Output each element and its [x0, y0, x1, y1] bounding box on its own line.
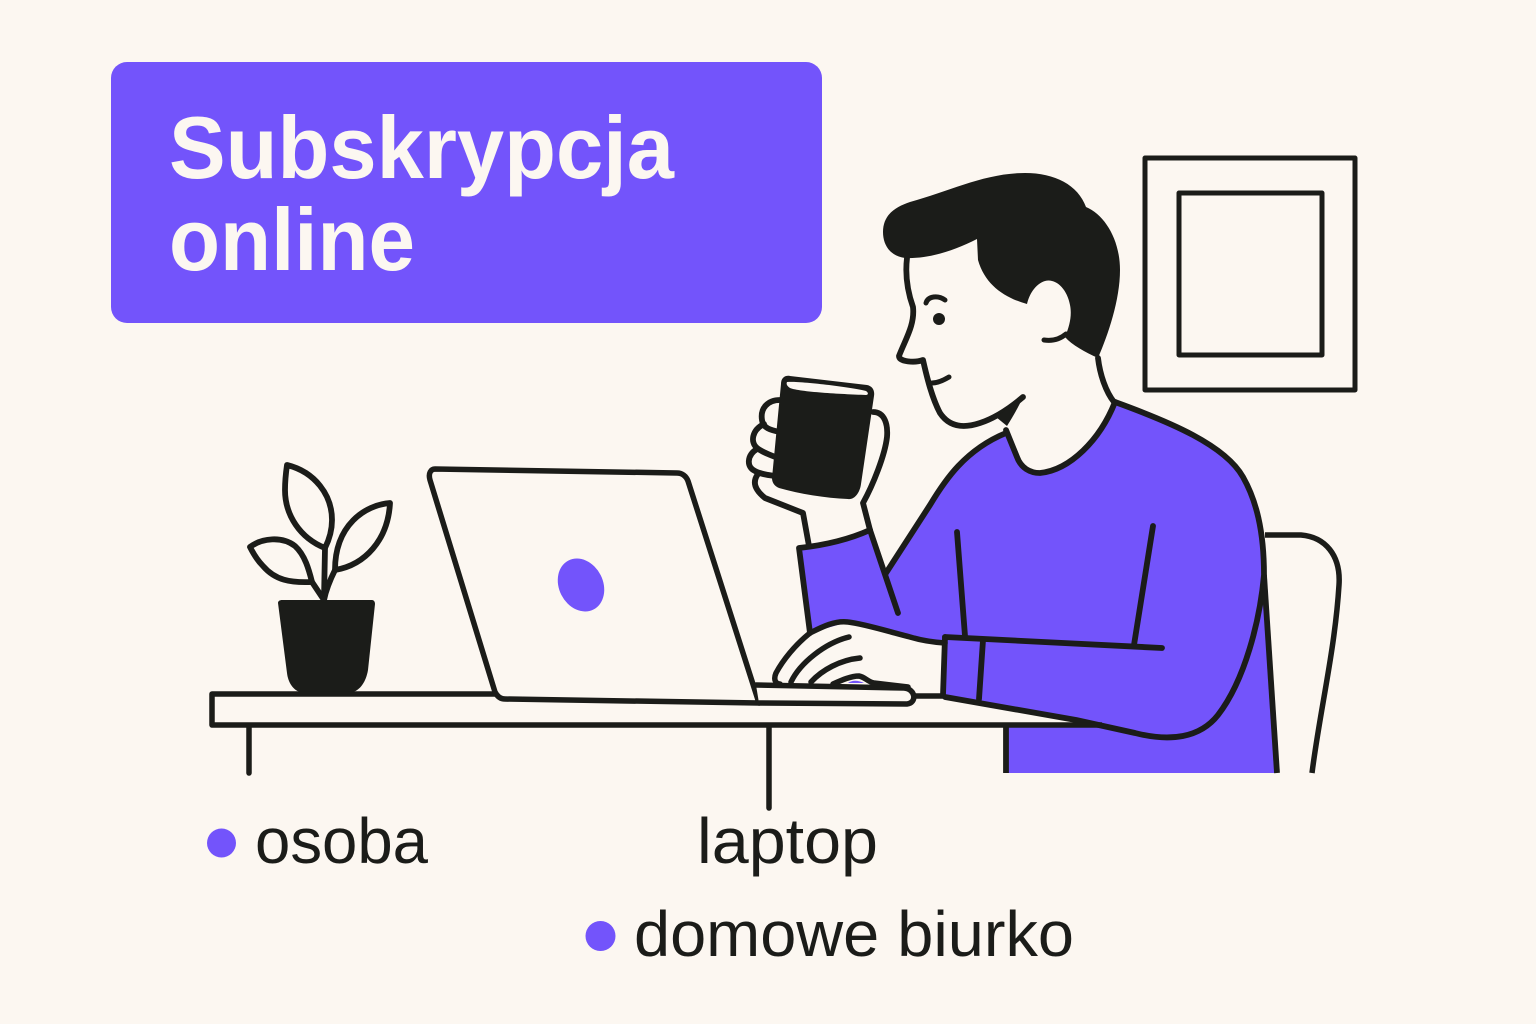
desk	[212, 694, 1102, 808]
laptop logo	[549, 551, 613, 619]
sweater outline	[799, 402, 1277, 773]
hair	[883, 173, 1120, 358]
legend: domowe biurko: domowe biurko	[634, 898, 1074, 970]
face	[899, 258, 1114, 426]
mug rim	[787, 382, 868, 395]
laptop	[429, 469, 914, 704]
title banner	[111, 62, 822, 323]
thumb gap	[848, 681, 864, 683]
person	[799, 173, 1277, 773]
sweater	[799, 402, 1277, 773]
jaw shadow	[996, 397, 1023, 426]
laptop base	[756, 685, 914, 704]
mug body	[772, 376, 874, 499]
coffee mug and hand	[749, 376, 887, 546]
typing hand	[775, 622, 945, 687]
title banner: online	[169, 190, 415, 289]
leaves	[285, 465, 332, 548]
legend: laptop: laptop	[697, 805, 878, 877]
eye	[933, 313, 945, 325]
picture frame	[1145, 158, 1355, 390]
title banner: Subskrypcja	[169, 98, 675, 197]
plant	[250, 465, 390, 692]
pot	[278, 600, 375, 692]
legend: osoba: osoba	[255, 805, 428, 877]
chair	[1265, 535, 1339, 773]
